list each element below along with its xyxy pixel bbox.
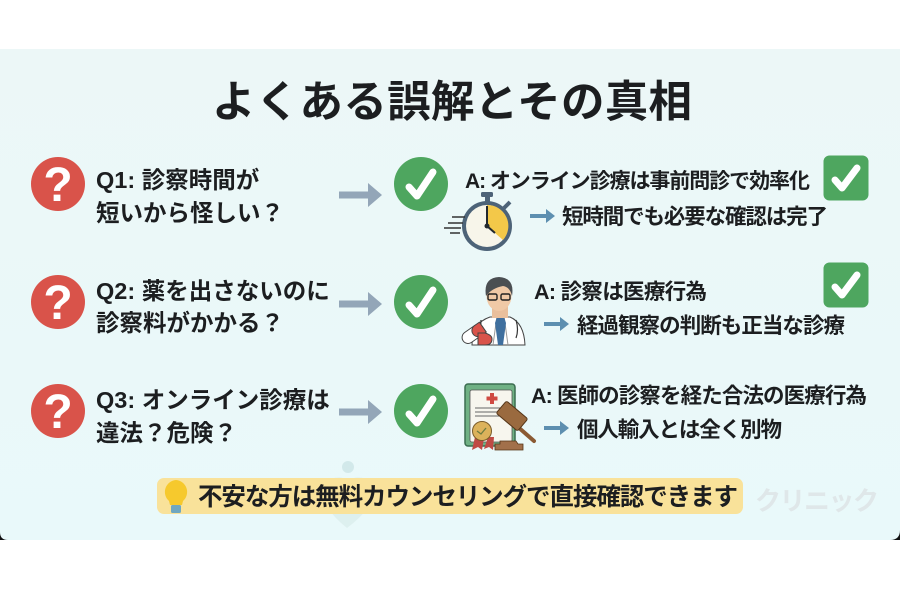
icon: green square check 2 <box>824 262 868 308</box>
black bottom corners <box>0 525 900 540</box>
icon: light bulb <box>165 480 187 513</box>
row 1: question <box>31 157 284 226</box>
icon: red question mark 3 <box>31 384 85 439</box>
answer 2 heading: A: 診察は医療行為 <box>534 280 707 304</box>
title: よくある誤解とその真相 <box>212 79 692 127</box>
callout banner <box>157 478 743 514</box>
row 2: question <box>31 275 330 336</box>
icon: certificate and gavel <box>465 384 534 450</box>
watermark clinic name: クリニック <box>755 486 879 516</box>
banner text: 不安な方は無料カウンセリングで直接確認できます <box>198 482 738 511</box>
question 2 text: 診察料がかかる？ <box>96 309 284 336</box>
answer 2 detail: 経過観察の判断も正当な診療 <box>577 314 845 338</box>
icon: doctor with pills <box>460 277 525 346</box>
answer 3 heading: A: 医師の診察を経た合法の医療行為 <box>531 384 867 408</box>
icon: red question mark 1 <box>31 157 85 212</box>
arrow 3b <box>544 421 569 435</box>
answer 3 detail: 個人輸入とは全く別物 <box>577 418 782 442</box>
question 3 text: Q3: オンライン診療は <box>96 387 330 413</box>
icon: green check 1 <box>394 157 448 211</box>
question 1 text: 短いから怪しい？ <box>96 200 284 226</box>
arrow 3 <box>339 400 382 424</box>
question 1 text: Q1: 診察時間が <box>96 166 260 193</box>
icon: green check 2 <box>394 275 448 329</box>
question 3 text: 違法？危険？ <box>96 420 237 446</box>
icon: stopwatch <box>444 192 512 251</box>
icon: red question mark 2 <box>31 275 85 330</box>
arrow 2 <box>339 292 382 316</box>
arrow 2b <box>544 317 569 331</box>
question 2 text: Q2: 薬を出さないのに <box>96 278 330 304</box>
icon: green square check 1 <box>824 156 868 200</box>
arrow 1b <box>530 209 555 223</box>
arrow 1 <box>339 183 382 207</box>
watermark logo <box>322 461 375 528</box>
answer 1 heading: A: オンライン診療は事前問診で効率化 <box>465 169 810 193</box>
row 3: question <box>31 384 330 446</box>
answer 1 detail: 短時間でも必要な確認は完了 <box>562 205 828 229</box>
icon: green check 3 <box>394 384 448 438</box>
